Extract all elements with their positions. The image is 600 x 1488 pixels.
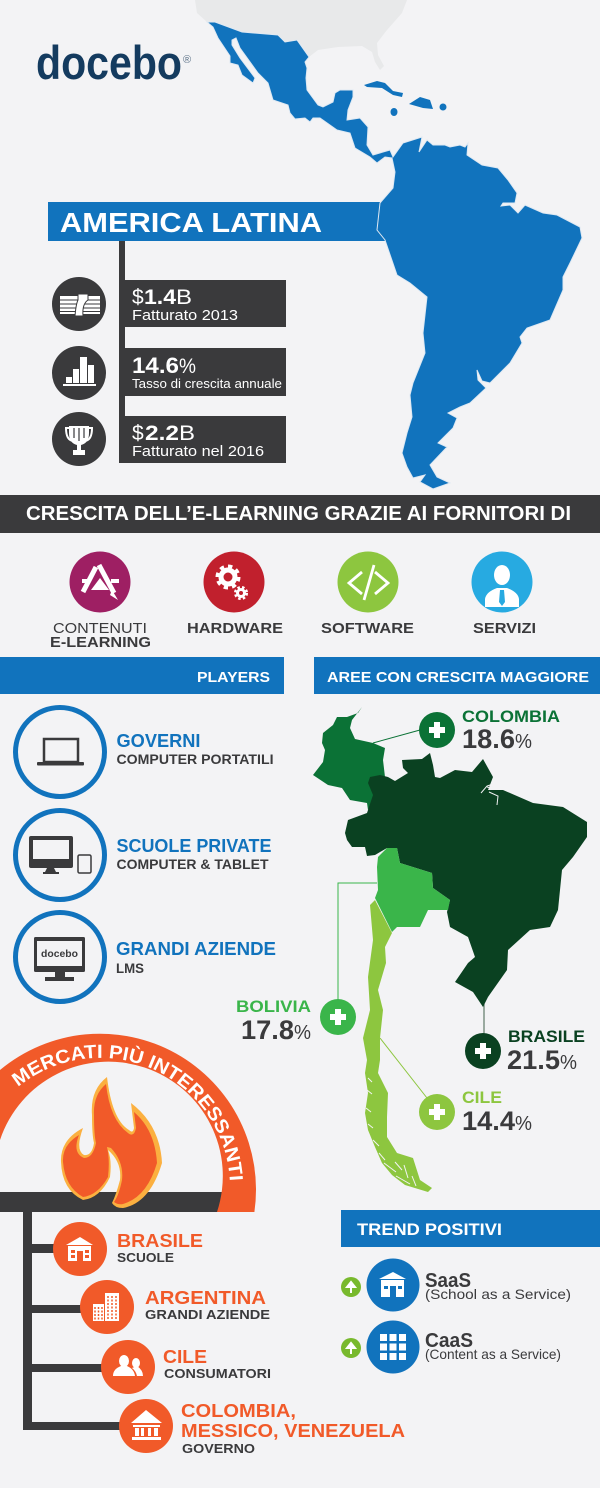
callout: bolivia: 17.8 [241, 1015, 294, 1045]
map region: brasile [345, 753, 587, 1007]
connector: brasile [483, 1004, 485, 1034]
callout: brasile: BRASILE [508, 1027, 585, 1046]
market: colombia messico venezuela: MESSICO, VENEZUELA [181, 1421, 405, 1441]
market: argentina [80, 1280, 270, 1334]
stat: revenue 2016: B [179, 422, 195, 445]
supplier: contenuti e-learning: CONTENUTI [53, 620, 147, 637]
player: grandi aziende: LMS [116, 961, 144, 976]
section header: e-learning growth [0, 495, 600, 533]
icon: trophy [52, 412, 106, 466]
title text: AMERICA LATINA [60, 207, 322, 238]
hot markets: tree connector [23, 1212, 125, 1430]
logo: ® [183, 54, 191, 66]
map detail: chile fjords [366, 1078, 416, 1186]
player: grandi aziende [16, 912, 276, 1002]
market: colombia messico venezuela: GOVERNO [182, 1441, 255, 1456]
stat: revenue 2016: 2.2 [145, 422, 179, 445]
callout: brasile: 21.5 [507, 1045, 560, 1075]
icon: person [485, 565, 519, 607]
trend: saas: (School as a Service) [425, 1286, 571, 1302]
market: brasile: SCUOLE [117, 1250, 174, 1265]
trend: saas: SaaS [425, 1270, 471, 1292]
icon: lms monitor [34, 937, 85, 981]
stat: growth rate: % [179, 355, 196, 378]
callout: cile: CILE [462, 1088, 502, 1107]
icon: laptop [37, 739, 84, 766]
stat: revenue 2013: 1.4 [144, 286, 176, 309]
map region: colombia [313, 707, 385, 810]
icon: school [66, 1237, 93, 1261]
section header: trend positivi [341, 1210, 600, 1247]
icon: computer and tablet [29, 836, 91, 874]
icon: people [113, 1355, 143, 1376]
market: colombia messico venezuela: COLOMBIA, [181, 1401, 296, 1421]
icon: lms monitor: docebo [41, 949, 78, 960]
icon: school [379, 1272, 406, 1297]
market: cile: CONSUMATORI [164, 1366, 271, 1381]
supplier: servizi [472, 552, 536, 637]
callout: brasile: % [560, 1052, 577, 1074]
player: governi: COMPUTER PORTATILI [116, 752, 274, 767]
supplier: hardware [187, 552, 283, 637]
section header: players [0, 657, 284, 694]
map: latin america [207, 22, 582, 489]
player: scuole private: COMPUTER & TABLET [116, 857, 269, 872]
section header: trend positivi: TREND POSITIVI [357, 1220, 502, 1239]
icon: buildings [93, 1293, 119, 1321]
player: scuole private: SCUOLE PRIVATE [116, 836, 272, 856]
icon: grid [380, 1334, 406, 1360]
hot markets: shelf bar [0, 1192, 222, 1212]
stat: growth rate [119, 348, 286, 396]
connector: cile [380, 1038, 427, 1098]
connector: colombia [373, 730, 420, 743]
trend: caas [341, 1320, 561, 1374]
trend: caas: CaaS [425, 1330, 473, 1352]
supplier: contenuti e-learning: E-LEARNING [50, 634, 151, 651]
market: brasile: BRASILE [117, 1231, 203, 1251]
player: grandi aziende: GRANDI AZIENDE [116, 939, 276, 959]
supplier: contenuti e-learning [50, 552, 151, 651]
supplier: software: SOFTWARE [321, 620, 414, 637]
supplier: servizi: SERVIZI [473, 620, 536, 637]
stat: revenue 2013: $ [132, 286, 144, 309]
stat: revenue 2013 [119, 280, 286, 327]
callout: bolivia [236, 997, 356, 1045]
map region: bolivia [375, 848, 450, 932]
connector: bolivia [338, 883, 377, 1000]
icon: flame [61, 1077, 162, 1208]
logo: docebo [36, 36, 182, 89]
stat: revenue 2013: Fatturato 2013 [132, 308, 238, 324]
player: governi: GOVERNI [116, 731, 200, 751]
icon: bar chart [52, 346, 106, 400]
map region: cile [363, 900, 432, 1192]
market: argentina: GRANDI AZIENDE [145, 1307, 270, 1322]
map: north america background [195, 0, 407, 70]
icon: code [349, 565, 388, 600]
section header: players: PLAYERS [197, 669, 270, 686]
hot markets: arc heading: MERCATI PIÙ INTERESSANTI [11, 1044, 243, 1180]
stat: revenue 2016: Fatturato nel 2016 [132, 444, 264, 460]
stat: growth rate: Tasso di crescita annuale [132, 376, 282, 391]
trend: caas: (Content as a Service) [425, 1346, 561, 1362]
map detail: amazon river [481, 784, 498, 805]
supplier: hardware: HARDWARE [187, 620, 283, 637]
market: brasile [53, 1222, 203, 1276]
title banner [48, 202, 386, 241]
supplier: software [321, 552, 414, 637]
callout: colombia: % [515, 731, 532, 753]
player: governi [16, 708, 274, 796]
map: growth countries [313, 707, 587, 1192]
section header: aree con crescita maggiore: AREE CON CRESCITA MAGGIORE [327, 669, 589, 686]
stat: revenue 2016 [119, 416, 286, 463]
stats connector line [119, 241, 125, 463]
market: argentina: ARGENTINA [145, 1288, 266, 1308]
stat: revenue 2013: B [176, 286, 192, 309]
icon: gears [218, 566, 247, 599]
callout: colombia: 18.6 [462, 724, 515, 754]
market: colombia messico venezuela [119, 1399, 405, 1456]
stat: growth rate: 14.6 [132, 353, 179, 378]
icon: pencil and brush [82, 565, 119, 600]
section header: aree con crescita maggiore [314, 657, 600, 694]
callout: brasile [465, 1027, 585, 1075]
callout: cile: % [515, 1113, 532, 1135]
callout: colombia: COLOMBIA [462, 707, 560, 726]
market: cile: CILE [163, 1347, 207, 1367]
callout: colombia [419, 707, 560, 754]
icon: money [52, 277, 106, 331]
trend: saas [341, 1258, 571, 1312]
market: cile [101, 1340, 271, 1394]
callout: bolivia: % [294, 1022, 311, 1044]
callout: cile: 14.4 [462, 1106, 515, 1136]
player: scuole private [16, 810, 272, 900]
callout: bolivia: BOLIVIA [236, 997, 311, 1016]
section header: e-learning growth: CRESCITA DELL’E-LEARNING GRAZIE AI FORNITORI DI [26, 503, 571, 525]
callout: cile [419, 1088, 532, 1136]
icon: government building [131, 1410, 162, 1440]
stat: revenue 2016: $ [132, 422, 144, 445]
